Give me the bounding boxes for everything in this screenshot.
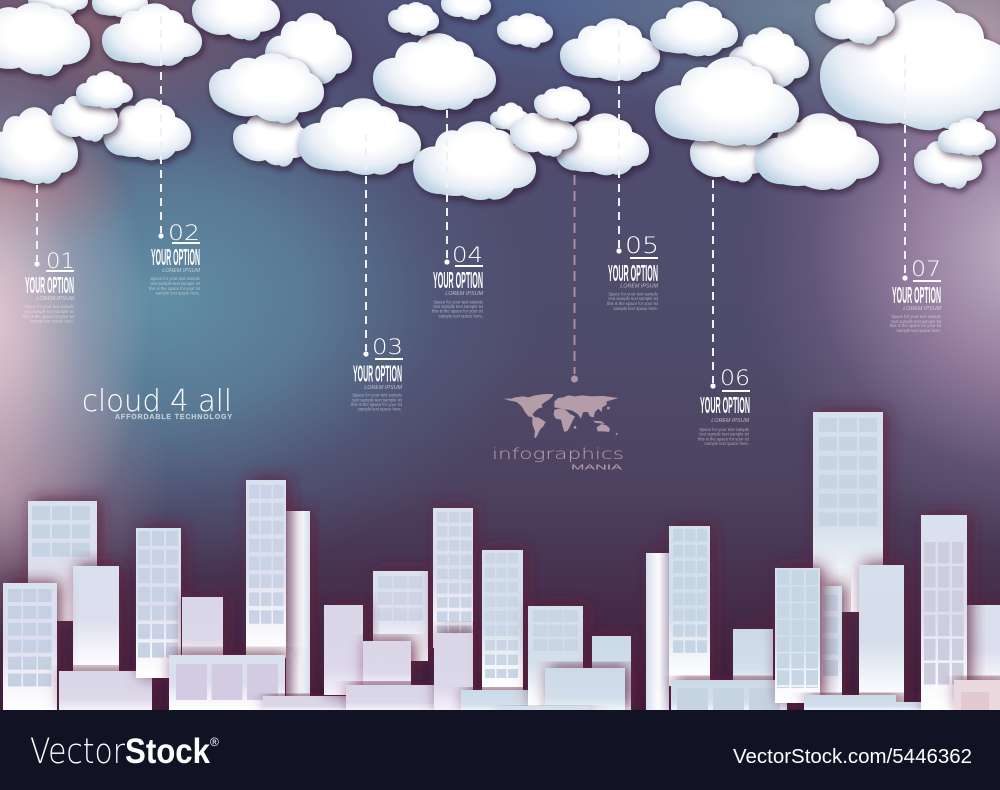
- building: tall windows centre: [433, 508, 473, 648]
- option 01: sample text space here.: [30, 318, 74, 324]
- option 06: 06: [720, 366, 750, 390]
- option 06: LOREM IPSUM: [711, 418, 749, 424]
- cityscape: [3, 412, 1000, 710]
- option 03: Space for your text sample: [352, 392, 403, 398]
- option 01: text sample text sample txt: [24, 309, 75, 314]
- building: low block with windows: [169, 655, 285, 710]
- option 07: sample text space here.: [897, 328, 941, 333]
- building: windows far right: [921, 515, 967, 710]
- cloud: small top edge: [441, 0, 491, 20]
- option 05: text sample text sample txt: [608, 296, 659, 301]
- building: far right plain: [967, 605, 1000, 695]
- building: tall back left: [28, 501, 97, 621]
- cloud: far right small: [938, 118, 996, 156]
- cloud: big far right: [820, 0, 1000, 130]
- option 02: sample text space here.: [156, 290, 200, 296]
- building: low front right: [804, 695, 937, 710]
- building: plain right: [592, 636, 631, 710]
- cloud: centre cluster middle: [510, 110, 577, 157]
- option 03: text sample text sample txt: [352, 398, 403, 402]
- option 02: LOREM IPSUM: [162, 268, 200, 274]
- line 07: [904, 55, 906, 275]
- footer brand: [30, 732, 219, 772]
- option 02: [149, 221, 201, 296]
- option 02: Space for your text sample: [150, 276, 201, 281]
- building: small plain: [182, 597, 223, 657]
- building: block: [324, 605, 363, 695]
- building: block low: [545, 668, 625, 710]
- cloud: small top: [92, 0, 148, 18]
- cloud: small centre top: [497, 13, 553, 48]
- text: YOUR OPTION: [700, 392, 750, 418]
- cloud: top right small: [815, 0, 895, 45]
- text: YOUR OPTION: [25, 272, 74, 298]
- option 05: sample text space here.: [614, 306, 658, 311]
- cloud: large right centre: [655, 57, 799, 146]
- option 05: [607, 234, 659, 311]
- footer id: VectorStock.com/5446362: [733, 746, 972, 768]
- cloud: behind upper centre: [265, 13, 352, 84]
- footer brand: Vector: [30, 732, 126, 772]
- text: YOUR OPTION: [151, 244, 200, 270]
- cloud: left cluster front: [76, 71, 133, 109]
- building: windows right: [669, 526, 710, 686]
- line 03: [365, 134, 367, 351]
- option 01: 01: [46, 249, 75, 273]
- option 01: LOREM IPSUM: [36, 296, 74, 302]
- option 06: sample text space here.: [705, 441, 749, 446]
- building: mid left plain: [73, 566, 119, 672]
- option 06: this is the space for your txt: [698, 436, 750, 442]
- option 04: [432, 243, 484, 318]
- cloud: behind lower right: [690, 126, 770, 183]
- logo: cloud 4 all: cloud 4 all: [82, 384, 232, 419]
- building: pink low right: [954, 680, 1000, 710]
- footer brand: Stock: [125, 732, 210, 771]
- option 07: [890, 257, 942, 333]
- option 04: LOREM IPSUM: [445, 291, 483, 297]
- dashed connector lines: [37, 16, 905, 383]
- line 02: [160, 16, 162, 233]
- building: windows: [482, 550, 523, 690]
- building: bottom strip: [498, 706, 590, 710]
- cloud: centre low: [298, 98, 421, 175]
- building: low centre: [346, 685, 434, 710]
- cloud: upper centre: [209, 53, 324, 123]
- world map: [503, 394, 618, 438]
- cloud: far left: [0, 107, 78, 184]
- cloud: top right: [650, 1, 738, 56]
- building: low windows right: [671, 680, 787, 710]
- cloud: top centre flat: [192, 0, 280, 41]
- footer bar: [0, 710, 1000, 790]
- option 05: LOREM IPSUM: [620, 284, 658, 290]
- option 01: this is the space for your txt: [23, 314, 75, 319]
- option 02: this is the space for your txt: [149, 286, 201, 291]
- cloud: centre cluster front: [534, 86, 590, 122]
- text: YOUR OPTION: [353, 360, 402, 386]
- cloud: lower right: [755, 113, 879, 190]
- building: low front: [263, 696, 356, 710]
- building: tallest: [813, 412, 883, 612]
- option 07: Space for your text sample: [891, 314, 942, 319]
- option 01: [23, 249, 75, 324]
- option 07: LOREM IPSUM: [903, 306, 941, 312]
- option 07: 07: [911, 257, 941, 281]
- option 04: sample text space here.: [439, 314, 483, 318]
- option 04: 04: [452, 243, 483, 267]
- option 04: this is the space for your txt: [432, 308, 484, 314]
- building: front far left: [3, 583, 57, 710]
- cloud: large top left: [0, 3, 90, 76]
- option 02: 02: [168, 221, 200, 245]
- building: windows tower right: [775, 568, 820, 703]
- option 03: [351, 335, 403, 412]
- building: windows centre: [373, 571, 428, 661]
- option 06: text sample text sample txt: [699, 432, 750, 436]
- option 05: Space for your text sample: [608, 292, 659, 296]
- cloud: top left centre: [102, 3, 202, 66]
- building: block extension: [363, 641, 411, 686]
- cloud: behind right: [728, 27, 809, 87]
- building: tall centre left: [246, 480, 286, 658]
- centre dot: [571, 376, 578, 382]
- cloud: small back of centre: [490, 103, 530, 131]
- option 05: this is the space for your txt: [607, 301, 659, 306]
- centre line: [574, 175, 576, 374]
- cloud: far right lower: [914, 138, 982, 189]
- option 01: Space for your text sample: [24, 304, 75, 309]
- building: narrow windows: [820, 586, 842, 706]
- building: windows tower left: [136, 528, 181, 678]
- option 06: Space for your text sample: [699, 427, 750, 432]
- option 04: text sample text sample txt: [433, 304, 484, 309]
- option 03: LOREM IPSUM: [364, 385, 402, 391]
- cloud: top right centre: [560, 18, 660, 81]
- line 01: [36, 185, 38, 261]
- footer brand: ®: [210, 735, 219, 749]
- logo: infographics mania: MANIA: [571, 464, 623, 472]
- option 06: [698, 366, 750, 446]
- cloud: left cluster back: [103, 98, 191, 160]
- building: plain slim tower: [286, 511, 310, 697]
- text: YOUR OPTION: [608, 260, 658, 286]
- building: slim right: [646, 553, 669, 710]
- option 04: Space for your text sample: [433, 300, 484, 304]
- cloud: top middle: [373, 33, 496, 110]
- logo: cloud 4 all: AFFORDABLE TECHNOLOGY: [115, 414, 232, 421]
- line 04: [446, 110, 448, 259]
- cloud: lower centre: [413, 121, 536, 200]
- cloud: top row small left: [28, 0, 88, 16]
- option 03: this is the space for your txt: [351, 402, 403, 407]
- building: low left block: [59, 671, 152, 710]
- cloud: behind lower centre: [233, 112, 310, 167]
- building: small plain right: [733, 629, 773, 684]
- building: plain tall right: [859, 565, 904, 705]
- text: YOUR OPTION: [433, 267, 483, 293]
- option 03: 03: [372, 335, 403, 359]
- cloud: small top middle: [388, 2, 439, 36]
- option 05: 05: [625, 234, 659, 259]
- option 07: this is the space for your txt: [890, 323, 942, 328]
- option 07: text sample text sample txt: [891, 319, 942, 324]
- logo: infographics mania: infographics: [492, 445, 624, 463]
- line 05: [618, 30, 620, 248]
- building: front plain centre: [434, 633, 473, 710]
- building: low strip: [461, 690, 533, 710]
- clouds layer: [0, 0, 1000, 200]
- line 06: [712, 180, 714, 383]
- cloud: left cluster middle: [52, 93, 118, 142]
- option 03: sample text space here.: [358, 406, 402, 412]
- option 02: text sample text sample txt: [150, 281, 201, 286]
- logo: infographics mania: [492, 445, 624, 472]
- cloud: centre cluster back: [555, 113, 649, 175]
- building: windows small: [528, 606, 583, 706]
